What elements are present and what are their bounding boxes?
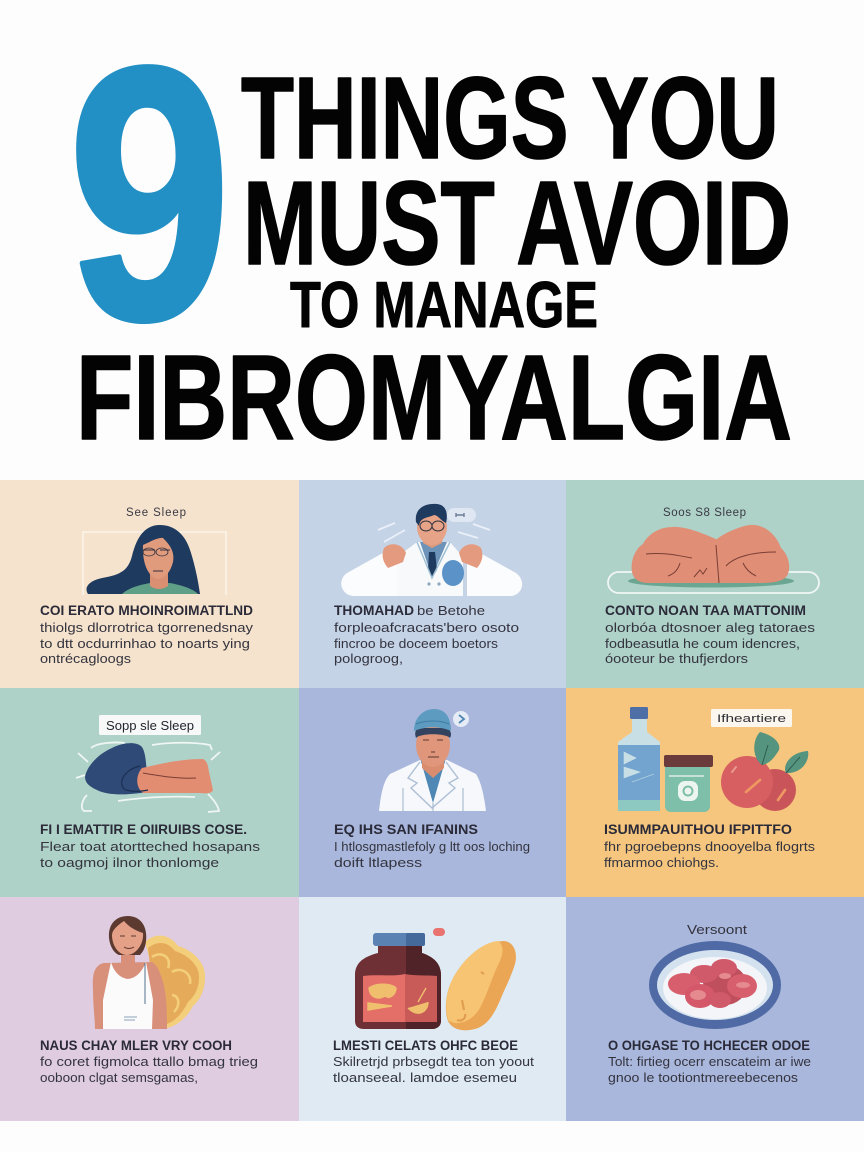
text block: tloanseeal. lamdoe esemeu — [333, 1071, 517, 1085]
panel: bottle jar and apples — [566, 688, 864, 897]
text block — [40, 1038, 258, 1085]
text block: EQ IHS SAN IFANINS — [334, 822, 478, 837]
text block: gnoo le tootiontmereebecenos — [608, 1071, 798, 1085]
icon: brain — [608, 525, 819, 593]
text block: óooteur be thufjerdors — [605, 652, 748, 666]
text block — [333, 1038, 535, 1085]
text block: thiolgs dlorrotrica tgorrenedsnay — [40, 621, 254, 635]
title — [76, 53, 792, 465]
text block: Skilretrjd prbsegdt tea ton yoout — [333, 1055, 535, 1069]
panel: plate of meat — [566, 897, 864, 1121]
text block: NAUS CHAY MLER VRY COOH — [40, 1038, 232, 1053]
text block: pologroog, — [334, 652, 403, 666]
icon: woman — [83, 525, 226, 595]
text block: be Betohe — [417, 604, 485, 618]
text block: fincroo be doceem boetors — [334, 637, 498, 651]
label box — [99, 715, 201, 735]
text block: ooboon clgat semsgamas, — [40, 1071, 198, 1085]
text block: doift ltlapess — [334, 856, 422, 870]
text block: Flear toat atortteched hosapans — [40, 840, 260, 854]
big number 9: 9 — [68, 0, 231, 395]
text block: FI I EMATTIR E OIIRUIBS COSE. — [40, 822, 247, 837]
icon: potato — [446, 941, 516, 1030]
icon: supplement jar — [355, 928, 445, 1029]
text block: Tolt: firtieg ocerr enscateim ar iwe — [608, 1055, 811, 1069]
icon: man with cap — [379, 709, 486, 811]
text block — [334, 603, 519, 666]
text block: ontrécagloogs — [40, 652, 131, 666]
icon: pain cloud — [145, 936, 205, 1029]
panel: brain on tray — [566, 480, 864, 688]
text block: ISUMMPAUITHOU IFPITTFO — [604, 822, 792, 837]
icon: plate — [649, 941, 781, 1029]
label box: Sopp sle Sleep — [106, 719, 194, 733]
text block — [40, 603, 254, 666]
text block — [605, 603, 815, 666]
text block: O OHGASE TO HCHECER ODOE — [608, 1038, 810, 1053]
icon: bottle — [618, 707, 660, 811]
panel: jar and potato — [299, 897, 566, 1121]
text block: COI ERATO MHOINROIMATTLND — [40, 603, 253, 618]
text block — [40, 822, 260, 870]
label box — [711, 709, 792, 727]
text block — [334, 822, 530, 870]
panel: doctor holding coat — [299, 480, 566, 688]
icon: jar — [664, 755, 713, 812]
text block: to oagmoj ilnor thonlomge — [40, 856, 219, 870]
icon: doctor — [341, 504, 522, 596]
icon: woman in white top — [93, 916, 167, 1029]
label box: Ifheartiere — [717, 713, 786, 725]
panel: man in white coat — [299, 688, 566, 897]
text block — [608, 1038, 811, 1085]
icon: limb under blanket — [76, 743, 220, 812]
panel: woman with glasses — [0, 480, 299, 688]
text block: fodbeasutla he coum idencres, — [605, 637, 800, 651]
text block: to dtt ocdurrinhao to noarts ying — [40, 637, 250, 651]
label: See Sleep — [126, 507, 186, 519]
text block: olorbóa dtosnoer aleg tatoraes — [605, 621, 815, 635]
text block: THOMAHAD — [334, 603, 414, 618]
icon: apples — [721, 732, 808, 811]
text block: fo coret figmolca ttallo bmag trieg — [40, 1055, 258, 1069]
panel: woman with pain cloud — [0, 897, 299, 1121]
panel: sleeping limb — [0, 688, 299, 897]
text block: I htlosgmastlefoly g ltt oos loching — [334, 840, 530, 854]
text block — [604, 822, 815, 870]
text block: ffmarmoo chiohgs. — [604, 856, 719, 870]
label: Soos S8 Sleep — [663, 507, 746, 519]
text block: CONTO NOAN TAA MATTONIM — [605, 603, 806, 618]
label: Versoont — [687, 923, 748, 937]
text block: fhr pgroebepns dnooyelba flogrts — [604, 840, 815, 854]
text block: forpleoafcracats'bero osoto — [334, 621, 519, 635]
title: TO MANAGE — [290, 268, 598, 341]
text block: LMESTI CELATS OHFC BEOE — [333, 1038, 518, 1053]
